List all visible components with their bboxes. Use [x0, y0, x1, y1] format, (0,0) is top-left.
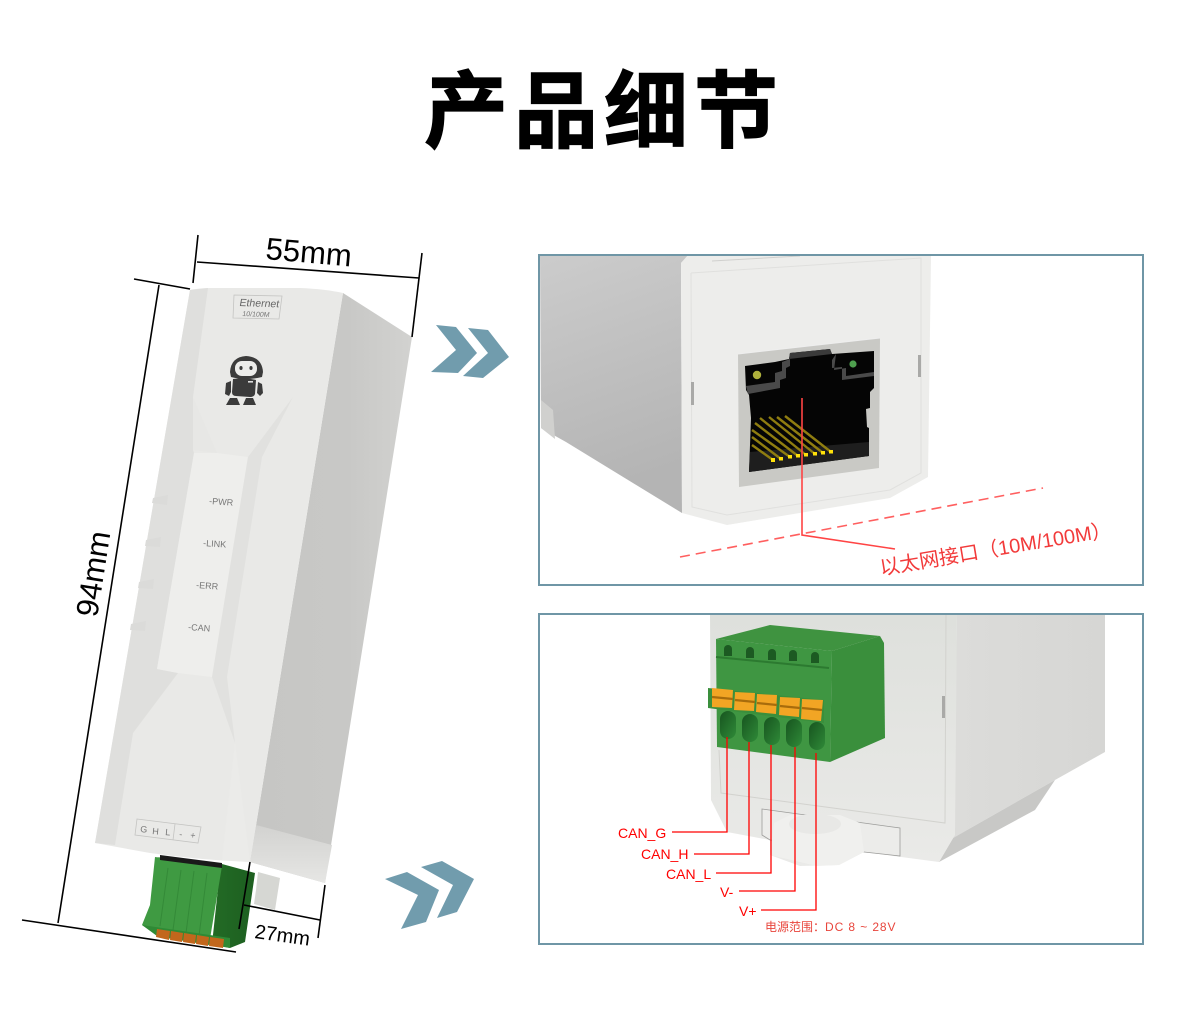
arrow: bottom chevrons [385, 861, 474, 929]
wiring callout lines [672, 737, 816, 910]
callout lines [680, 398, 1043, 557]
panel background [539, 614, 1143, 944]
centre light column [157, 453, 248, 677]
LED yellow [753, 371, 761, 379]
label: G H L - +: L [165, 827, 171, 838]
dimension: 27mm [239, 862, 325, 951]
device side face [250, 293, 412, 883]
RJ45 jack [738, 338, 880, 487]
label: G H L - + [135, 819, 201, 843]
right LED housing shade [832, 354, 874, 380]
product: full device view [95, 288, 412, 948]
mounting bracket [254, 872, 280, 910]
panel: terminal block [539, 614, 1143, 944]
panel background [539, 255, 1143, 585]
LED labels: -PWR [209, 496, 234, 508]
LED labels: -LINK [203, 538, 227, 550]
wiring labels: V- [720, 884, 734, 900]
darker strip [212, 397, 293, 743]
wiring labels: V+ [739, 903, 757, 919]
LED labels [188, 496, 234, 634]
label: G H L - +: G [140, 824, 148, 835]
green terminal block [708, 625, 885, 762]
wiring labels: CAN_H [641, 846, 688, 862]
LED labels: -ERR [196, 580, 219, 592]
panel: ethernet port [539, 255, 1143, 585]
LED green [849, 360, 857, 368]
device front face [95, 288, 343, 862]
device render: port closeup [540, 255, 1113, 580]
light facet [193, 397, 217, 453]
LED labels: -CAN [188, 622, 211, 634]
dimension: 27mm: 27mm [253, 921, 311, 951]
label: G H L - +: H [152, 826, 159, 837]
lower right facet [222, 743, 250, 862]
dimension: 55mm: 55mm [264, 231, 353, 273]
label: G H L - +: - [179, 829, 183, 839]
label: Ethernet 10/100M [233, 295, 282, 319]
contacts [752, 416, 831, 460]
label: G H L - +: + [190, 830, 196, 841]
title: 产品细节 [424, 65, 784, 159]
wiring labels: CAN_L [666, 866, 711, 882]
dimension: 55mm [193, 231, 422, 337]
left LED housing shade [746, 359, 790, 394]
left side clips [130, 495, 168, 631]
wiring labels [618, 825, 757, 919]
foot and slot [762, 809, 900, 866]
power range note: 电源范围：DC 8 ~ 28V [765, 920, 896, 934]
label: Ethernet 10/100M: Ethernet [238, 297, 280, 310]
device render: connector closeup [618, 615, 1105, 934]
arrow: top chevrons [431, 325, 509, 378]
dimension: 94mm [22, 279, 236, 952]
callout text: 以太网接口（10M/100M） [878, 519, 1113, 580]
label: Ethernet 10/100M: 10/100M [242, 311, 270, 319]
panel border [539, 255, 1143, 585]
icon: robot logo [225, 356, 263, 405]
panel border [539, 614, 1143, 944]
wiring labels: CAN_G [618, 825, 666, 841]
dimension: 94mm: 94mm [69, 529, 117, 619]
device side lower band [250, 825, 332, 883]
front left band [95, 288, 208, 845]
green connector [142, 855, 255, 948]
